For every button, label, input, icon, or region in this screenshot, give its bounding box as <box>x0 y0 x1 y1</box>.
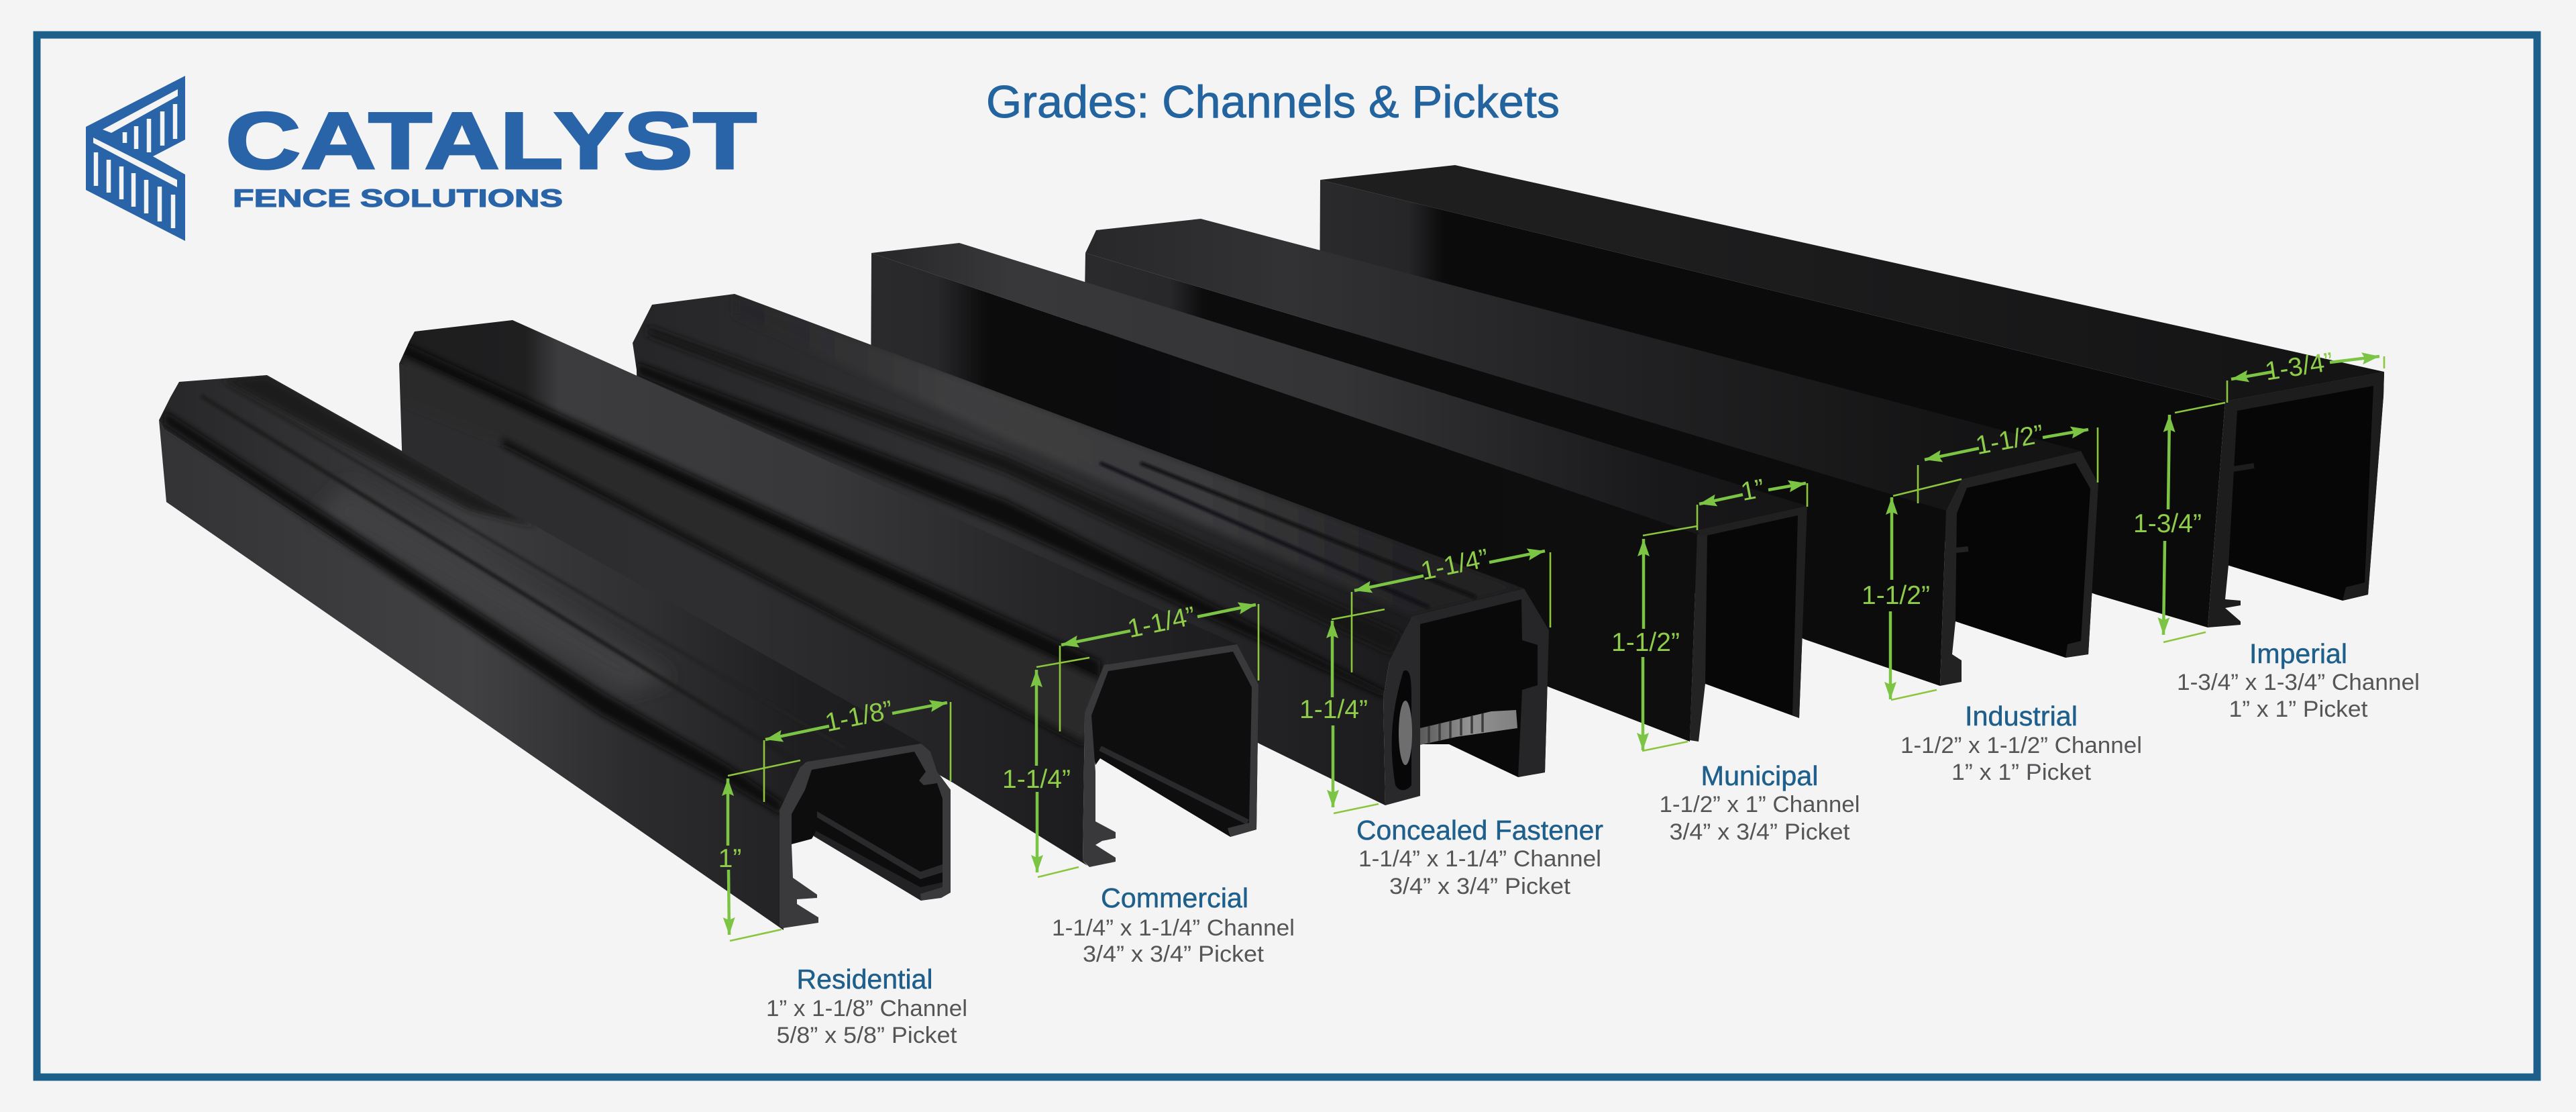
label: concealed fastener: 3/4” x 3/4” Picket <box>1389 874 1571 899</box>
industrial frame <box>1940 451 2098 686</box>
dimensions: commercial <box>1002 601 1258 877</box>
concealed surface bands <box>637 294 1524 698</box>
label: residential: 5/8” x 5/8” Picket <box>777 1023 957 1048</box>
dimension width 1-1/4: 1-1/4” <box>1125 601 1198 644</box>
concealed left wall <box>1383 616 1420 805</box>
concealed opening <box>1389 589 1549 777</box>
dimension height 1-3/4: 1-3/4” <box>2133 509 2202 538</box>
commercial surface bands <box>402 342 1100 747</box>
label: concealed fastener: Concealed Fastener <box>1356 815 1603 846</box>
label: residential: Residential <box>797 964 932 995</box>
dimensions: concealed fastener <box>1299 544 1550 813</box>
residential surface bands <box>164 375 845 815</box>
industrial opening <box>1946 451 2098 658</box>
residential opening <box>780 744 951 901</box>
imperial top face <box>1320 165 2384 401</box>
label: commercial: 1-1/4” x 1-1/4” Channel <box>1052 915 1295 941</box>
residential inner rib <box>817 811 943 879</box>
logo wordmark: CATALYST <box>225 96 757 186</box>
commercial top face <box>399 320 1237 713</box>
dimensions: imperial <box>2133 348 2384 642</box>
channel: imperial <box>1320 165 2384 627</box>
residential frame <box>780 744 951 928</box>
concealed body <box>633 294 1524 805</box>
dimensions: industrial <box>1862 419 2098 700</box>
dimension height 1-1/4: 1-1/4” <box>1299 695 1368 724</box>
label: imperial: Imperial <box>2249 638 2347 669</box>
icon: fastener screw <box>1399 701 1517 765</box>
municipal opening <box>1697 506 1807 718</box>
dimension height 1-1/4: 1-1/4” <box>1002 765 1071 794</box>
commercial side face <box>399 364 1087 866</box>
label: commercial <box>1052 882 1295 967</box>
label: commercial: 3/4” x 3/4” Picket <box>1083 942 1265 967</box>
municipal right leg <box>1697 506 1807 718</box>
channel: concealed fastener <box>633 294 1549 805</box>
label: commercial: Commercial <box>1101 882 1248 913</box>
label: municipal: Municipal <box>1701 760 1818 791</box>
label: municipal <box>1660 760 1860 845</box>
dimension height 1: 1” <box>718 844 741 873</box>
concealed right wall <box>1412 589 1549 777</box>
dimension width 1-3/4: 1-3/4” <box>2263 348 2335 387</box>
channel: commercial <box>399 320 1258 867</box>
dimension height 1-1/2: 1-1/2” <box>1862 581 1930 610</box>
label: municipal: 3/4” x 3/4” Picket <box>1669 819 1850 845</box>
dimension width 1-1/4: 1-1/4” <box>1418 544 1491 586</box>
logo <box>86 76 757 241</box>
label: imperial <box>2177 638 2420 722</box>
municipal top face <box>871 243 1807 534</box>
imperial side face <box>1320 180 2225 627</box>
label: concealed fastener <box>1356 815 1603 899</box>
imperial frame <box>2208 372 2384 627</box>
label: municipal: 1-1/2” x 1” Channel <box>1660 792 1860 817</box>
municipal side face <box>871 253 1697 742</box>
commercial opening <box>1085 644 1258 837</box>
dimensions: residential <box>718 695 951 941</box>
residential side face <box>159 420 784 930</box>
title: Grades: Channels & Pickets <box>986 77 1560 128</box>
logo tagline: FENCE SOLUTIONS <box>233 185 563 212</box>
dimension width 1: 1” <box>1738 474 1767 507</box>
label: residential <box>766 964 967 1048</box>
label: industrial: Industrial <box>1965 701 2078 731</box>
industrial side face <box>1084 253 1946 686</box>
imperial opening <box>2225 372 2384 601</box>
industrial top face <box>1085 219 2081 511</box>
channel: industrial <box>1084 219 2098 686</box>
channel: municipal <box>871 243 1807 742</box>
dimension height 1-1/2: 1-1/2” <box>1611 628 1680 657</box>
dimension width 1-1/2: 1-1/2” <box>1974 419 2046 460</box>
channel: residential <box>159 375 951 930</box>
residential top face <box>159 375 922 813</box>
municipal left leg <box>1690 534 1707 742</box>
dimensions: municipal <box>1611 474 1807 751</box>
label: residential: 1” x 1-1/8” Channel <box>766 996 967 1021</box>
label: imperial: 1-3/4” x 1-3/4” Channel <box>2177 670 2420 695</box>
label: industrial <box>1900 701 2142 785</box>
label: concealed fastener: 1-1/4” x 1-1/4” Channel <box>1358 846 1601 872</box>
label: industrial: 1-1/2” x 1-1/2” Channel <box>1900 733 2142 758</box>
icon: catalyst fence chevron <box>86 76 185 241</box>
commercial frame <box>1083 644 1258 867</box>
label: imperial: 1” x 1” Picket <box>2229 697 2368 722</box>
label: industrial: 1” x 1” Picket <box>1951 760 2092 785</box>
dimension width 1-1/8: 1-1/8” <box>822 695 896 738</box>
